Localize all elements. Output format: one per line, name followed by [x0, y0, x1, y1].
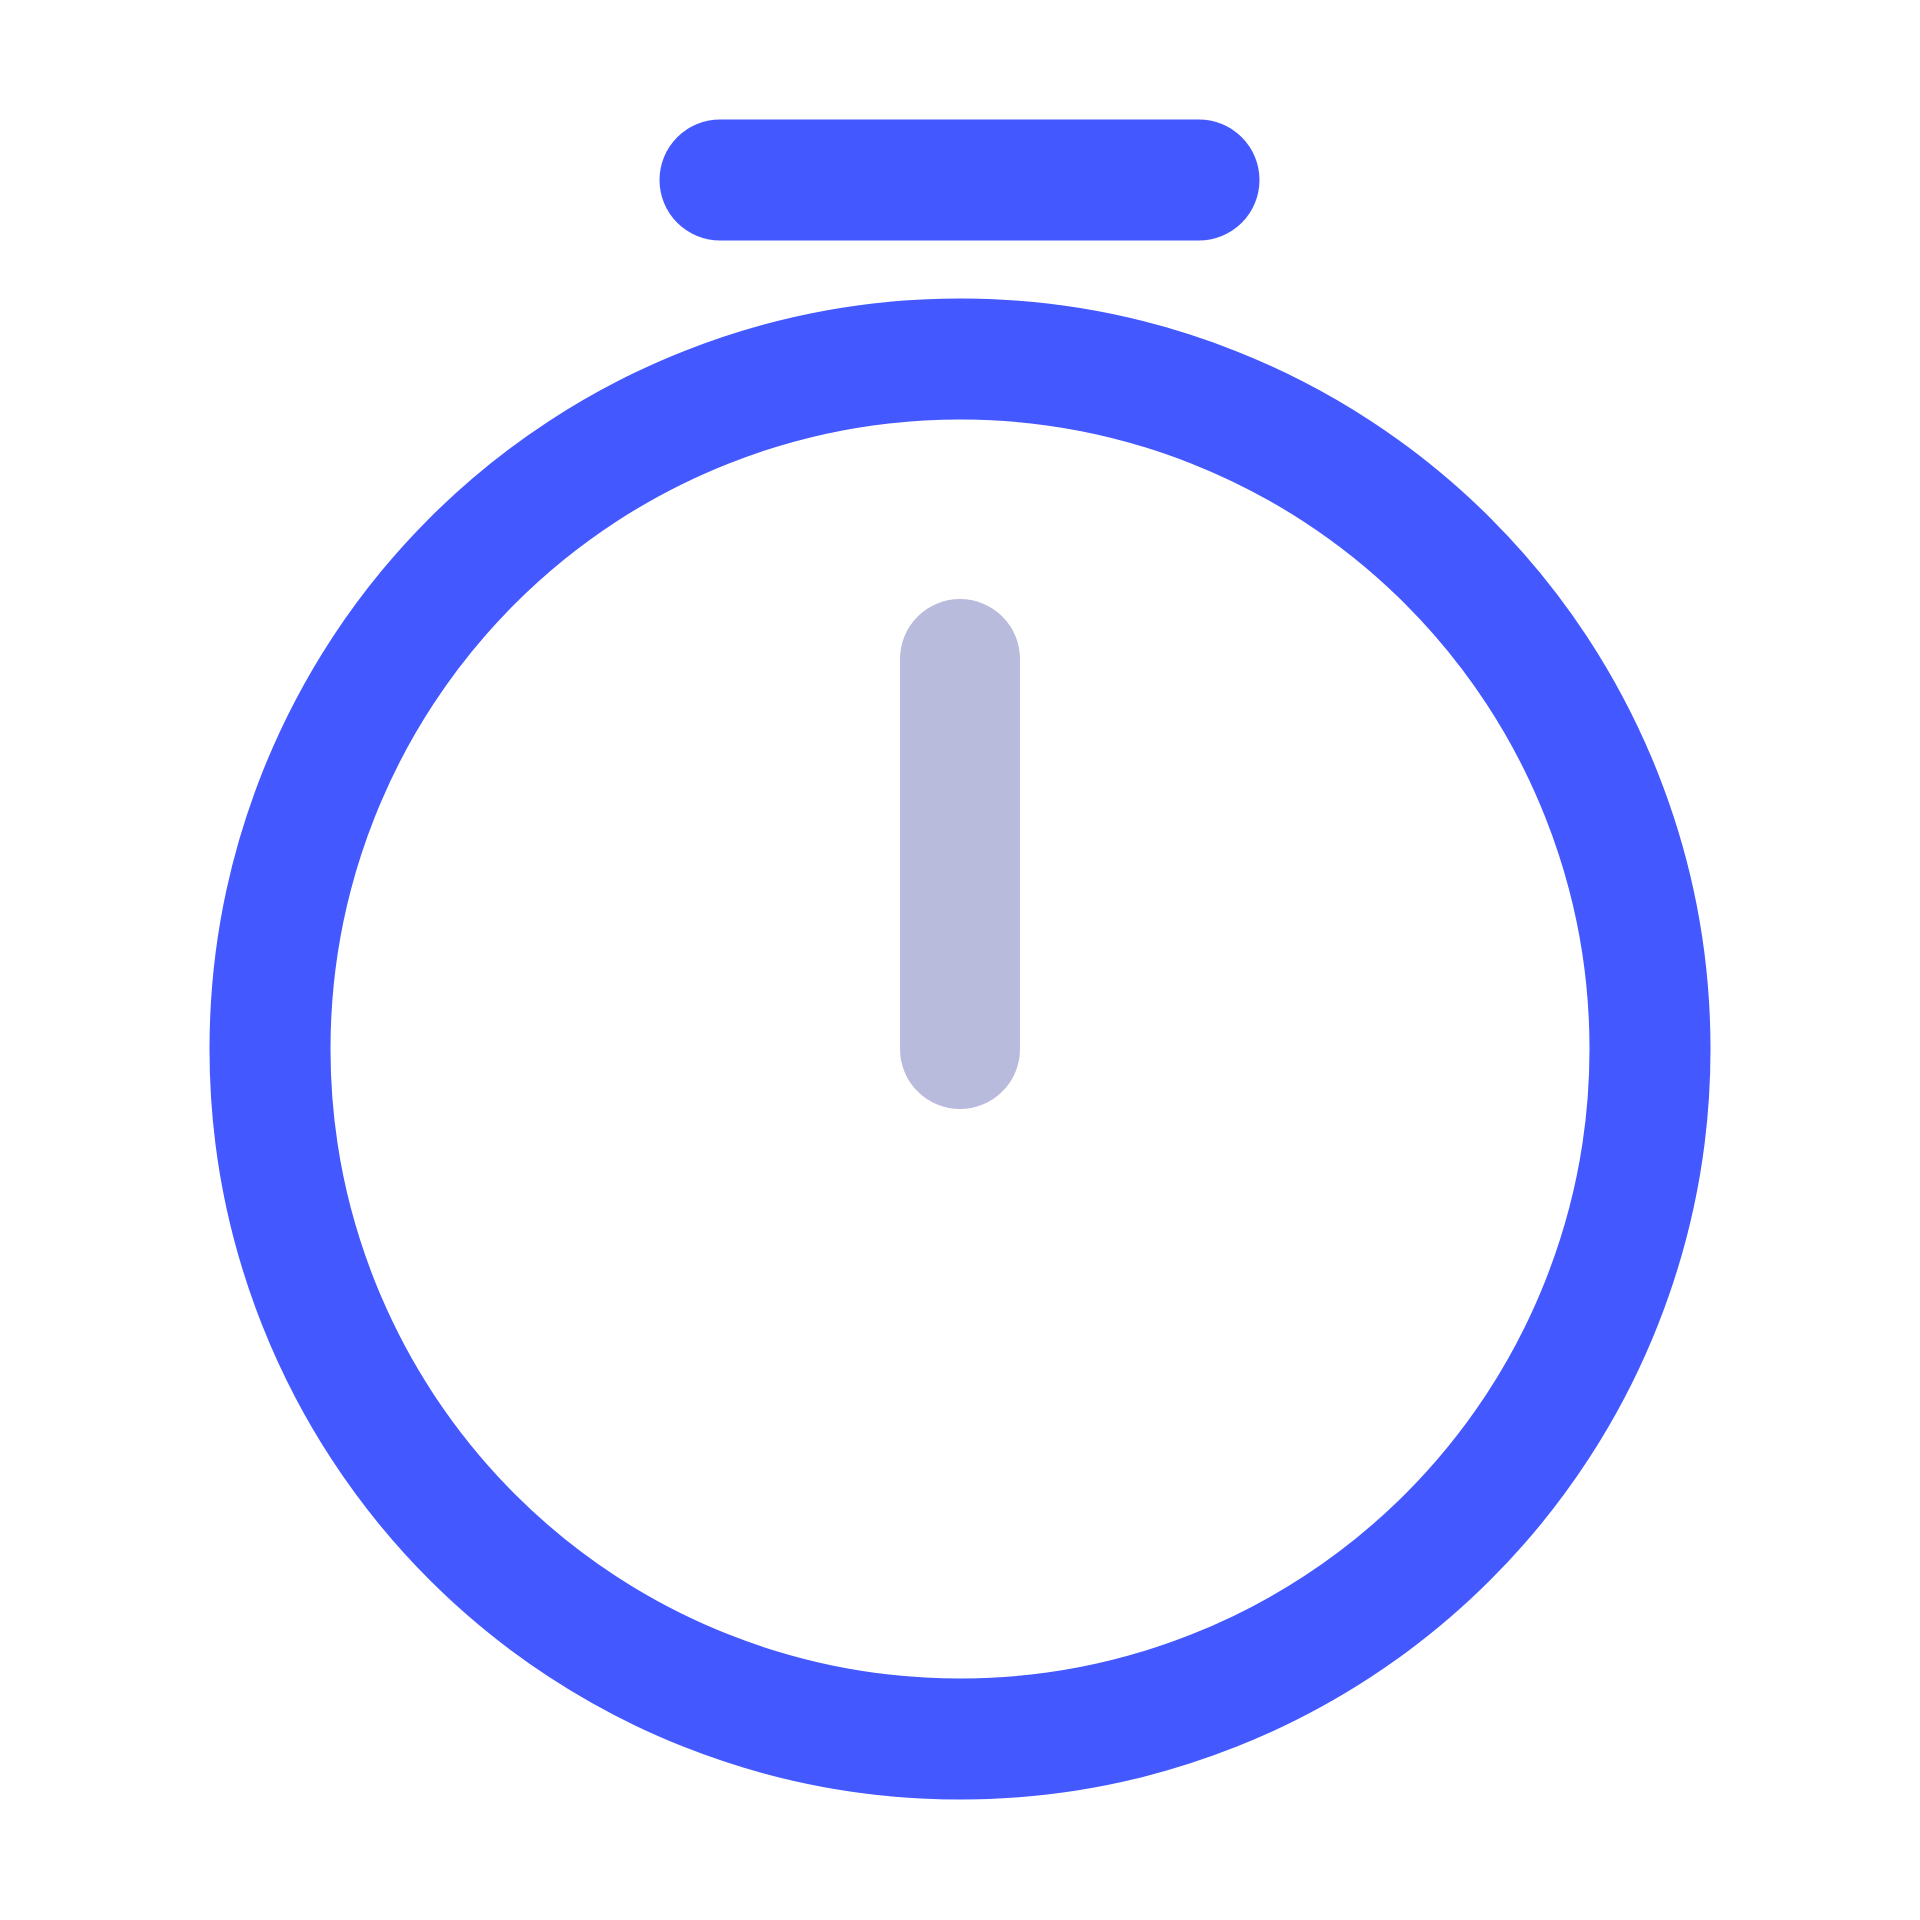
stopwatch body ring	[270, 359, 1650, 1739]
stopwatch hand	[900, 659, 1020, 1049]
stopwatch top button bar	[720, 120, 1199, 240]
